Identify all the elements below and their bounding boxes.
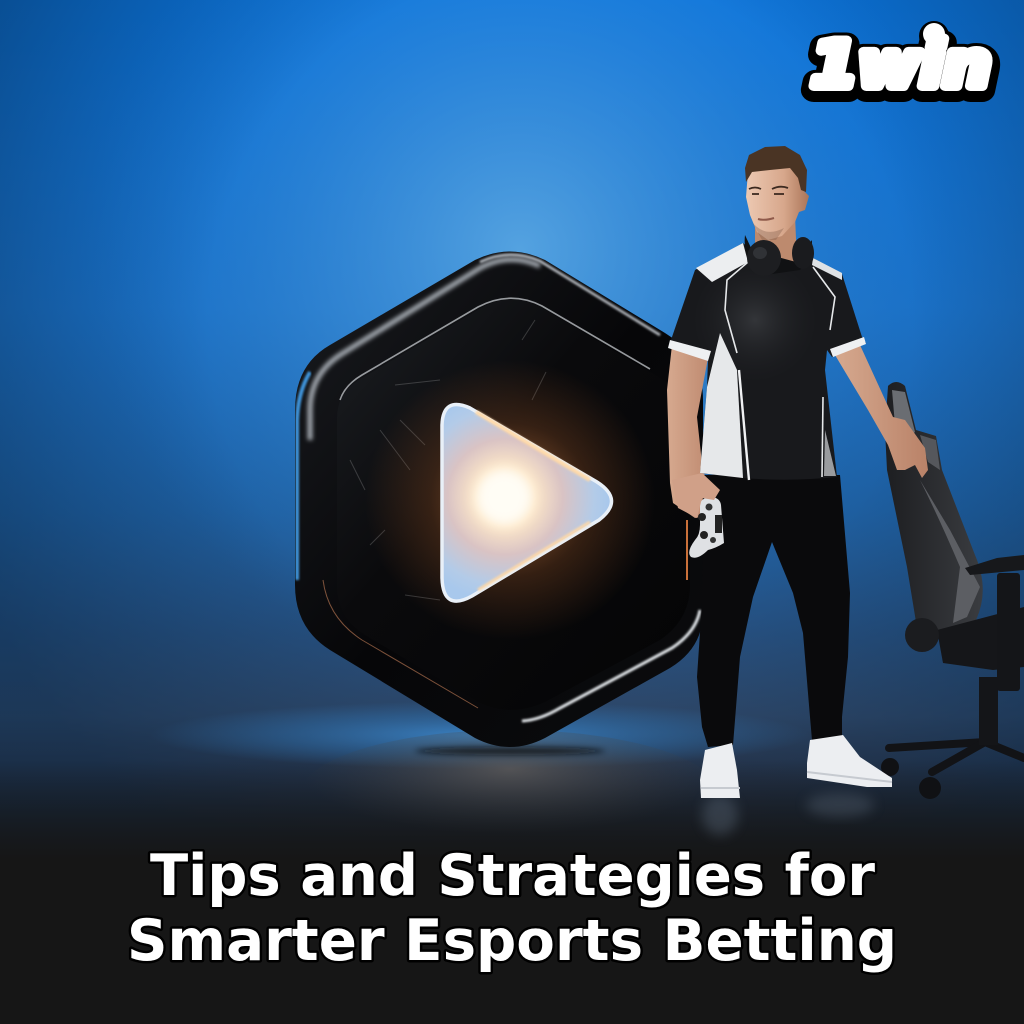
scratches bbox=[350, 320, 546, 600]
floor reflection bbox=[150, 701, 874, 860]
hexagon outer frame bbox=[295, 252, 703, 747]
hand on controller bbox=[672, 473, 720, 518]
logo: 1win: 1win bbox=[811, 32, 991, 105]
face features bbox=[749, 187, 788, 220]
game controller bbox=[689, 497, 724, 558]
man with headset and controller bbox=[667, 146, 928, 798]
neck bbox=[755, 215, 797, 263]
arm left bbox=[667, 345, 720, 518]
shoes bbox=[700, 743, 740, 798]
head bbox=[746, 155, 809, 240]
title bbox=[127, 843, 897, 974]
chair base bbox=[889, 742, 1024, 772]
chair armrest bbox=[965, 555, 1024, 575]
trousers bbox=[697, 475, 850, 747]
chair seat bbox=[937, 607, 1024, 670]
title line 1: Tips and Strategies for bbox=[150, 843, 875, 909]
chair back bbox=[885, 382, 983, 640]
hexagon inner face bbox=[337, 299, 690, 710]
arm right bbox=[835, 345, 928, 478]
hair bbox=[745, 146, 807, 192]
headphones bbox=[745, 235, 812, 275]
play triangle bbox=[442, 404, 612, 601]
jersey bbox=[668, 243, 866, 480]
logo: 1win: 1win bbox=[811, 28, 991, 101]
jersey white panels bbox=[696, 243, 748, 282]
play glow bbox=[365, 360, 655, 640]
title line 2: Smarter Esports Betting bbox=[127, 908, 897, 974]
gaming chair bbox=[881, 382, 1024, 799]
hexagon badge with play icon bbox=[295, 252, 703, 747]
